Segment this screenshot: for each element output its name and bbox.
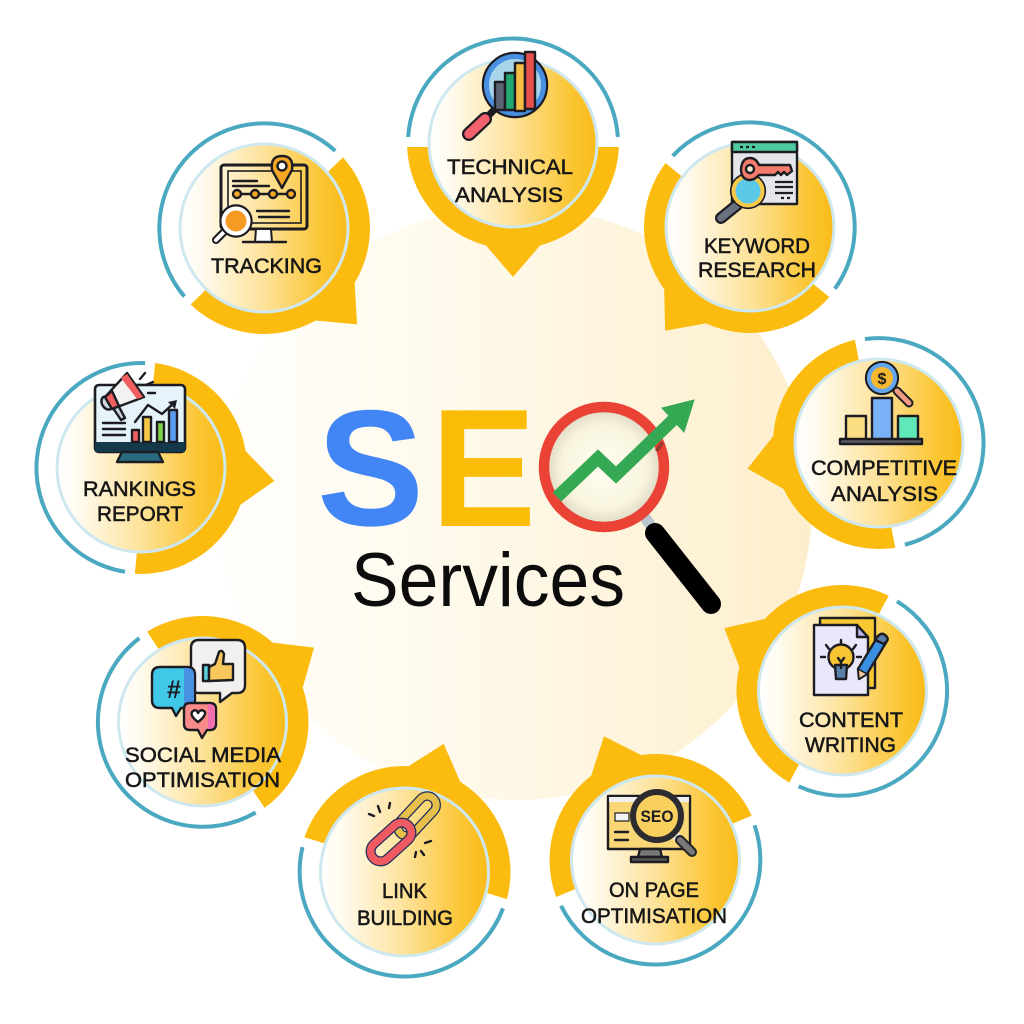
- label: BUILDING: [357, 906, 453, 930]
- label: TECHNICAL: [447, 155, 573, 179]
- label: WRITING: [805, 733, 896, 757]
- badge: link building: [273, 713, 545, 1003]
- label: [799, 708, 903, 757]
- badge: tracking: [115, 79, 433, 398]
- badge: content writing: [674, 535, 985, 834]
- label: [125, 743, 282, 792]
- icon: key and magnifier on browser window: [721, 142, 797, 218]
- word Services: Services: [351, 538, 625, 623]
- label: OPTIMISATION: [581, 904, 727, 928]
- label: [811, 456, 957, 506]
- label: REPORT: [97, 502, 183, 526]
- inner disc: [758, 607, 926, 775]
- icon: magnifier over bar chart: [469, 52, 547, 134]
- magnifying glass O: [544, 407, 711, 604]
- icon: bar podium with dollar magnifier: $: [878, 371, 887, 388]
- label: LINK: [382, 879, 428, 903]
- label: [698, 234, 816, 282]
- inner disc: [180, 144, 348, 312]
- central pale circle: [218, 206, 812, 800]
- icon: chain links: [366, 792, 440, 865]
- badge: rankings report: [27, 353, 285, 586]
- label: CONTENT: [799, 708, 903, 732]
- badge ring and pointer: [115, 79, 433, 398]
- letter S: S: [317, 376, 424, 560]
- badge ring and pointer: [583, 79, 898, 398]
- icon: paper, lightbulb and pencil: [814, 618, 888, 695]
- label: OPTIMISATION: [125, 768, 280, 792]
- inner disc: [666, 143, 834, 311]
- label: KEYWORD: [704, 234, 810, 258]
- label: ON PAGE: [609, 878, 699, 902]
- icon: social chat bubbles: [152, 640, 245, 738]
- label: SOCIAL MEDIA: [125, 743, 282, 767]
- badge: competitive analysis: [727, 319, 1002, 573]
- icon: monitor with SEO magnifier: [608, 792, 692, 862]
- letter E: E: [431, 374, 536, 562]
- icon: bar podium with dollar magnifier: [840, 362, 922, 444]
- label: COMPETITIVE: [811, 456, 957, 480]
- inner disc: [572, 776, 740, 944]
- label: [447, 155, 573, 207]
- badge ring and pointer: [27, 353, 285, 586]
- icon: monitor with SEO magnifier: SEO: [640, 808, 674, 826]
- inner disc: [57, 384, 225, 552]
- label: ANALYSIS: [455, 183, 563, 207]
- badge ring and pointer: [727, 319, 1002, 573]
- icon: monitor with location pin and magnifier: [216, 156, 307, 242]
- label: RANKINGS: [83, 477, 196, 501]
- badge ring and pointer: [674, 535, 985, 834]
- badge: keyword research: [583, 79, 898, 398]
- inner disc: [795, 359, 963, 527]
- label: TRACKING: [211, 254, 322, 278]
- badge: technical analysis: [407, 38, 619, 277]
- inner disc: [118, 638, 286, 806]
- badge ring and pointer: [57, 560, 373, 868]
- icon: monitor with megaphone and chart: [95, 373, 185, 462]
- label: [83, 477, 196, 526]
- badge: on page optimisation: [506, 696, 793, 997]
- label: RESEARCH: [698, 258, 816, 282]
- badge ring and pointer: [273, 713, 545, 1003]
- label: [581, 878, 727, 928]
- badge ring and pointer: [506, 696, 793, 997]
- label: ANALYSIS: [831, 482, 938, 506]
- label: [357, 879, 453, 930]
- badge: social media optimisation: [57, 560, 373, 868]
- inner disc: [320, 788, 488, 956]
- green growth arrow: [557, 400, 694, 497]
- badge ring and pointer: [407, 38, 619, 277]
- title: SEO Services logo: [317, 374, 711, 623]
- icon: social chat bubbles: #: [167, 676, 181, 704]
